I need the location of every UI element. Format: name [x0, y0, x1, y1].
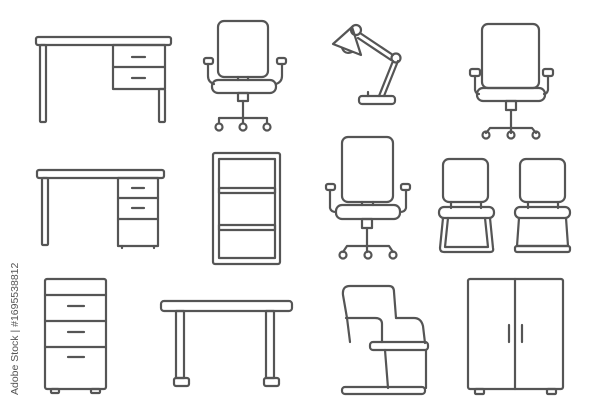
- icon: desk with two drawers: [36, 37, 171, 122]
- icon: executive chair: [470, 24, 553, 138]
- icon: desk with drawer pedestal: [37, 170, 164, 248]
- icon: table: [161, 301, 292, 386]
- icon: cantilever armchair: [342, 286, 428, 394]
- icon: visitor chair 2: [515, 159, 570, 252]
- icon: office chair high back: [326, 137, 410, 258]
- icon: desk lamp: [333, 25, 400, 104]
- icon: filing cabinet: [45, 279, 106, 393]
- icon: wardrobe: [468, 279, 563, 394]
- icon: visitor chair: [439, 159, 494, 252]
- credit text: Adobe Stock | #1695538812: [9, 263, 21, 395]
- icon: bookcase: [213, 153, 280, 264]
- icon: office chair: [204, 21, 286, 130]
